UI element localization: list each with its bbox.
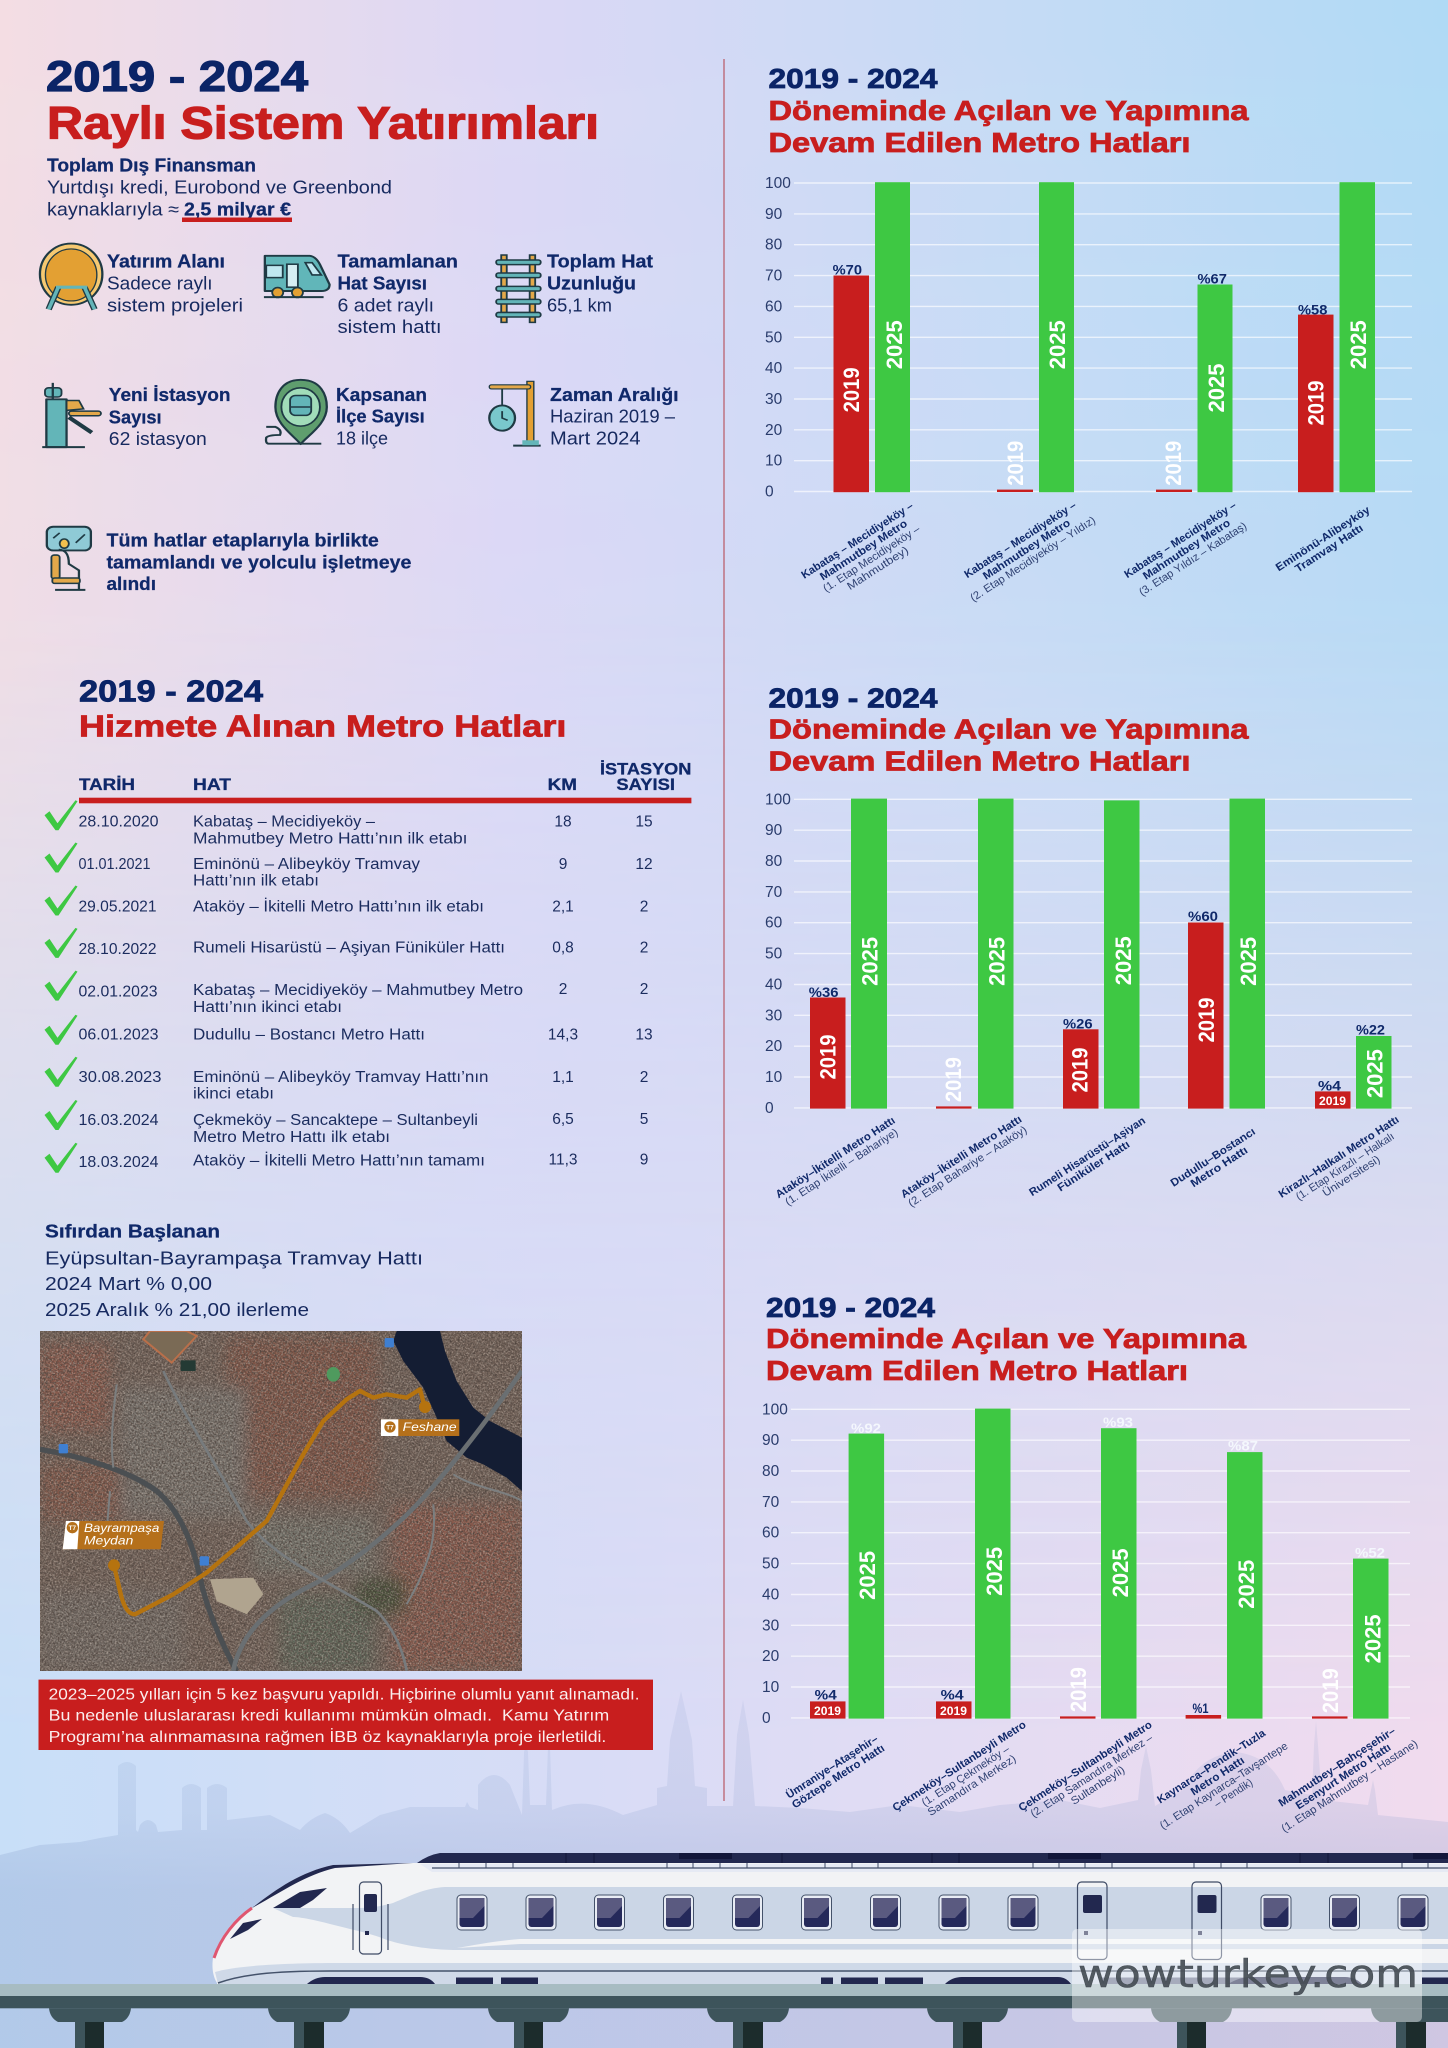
bars chart 1: 2025 xyxy=(882,320,907,369)
stat: time range xyxy=(550,384,679,448)
row 1: 15 xyxy=(635,813,653,830)
bars chart 2: %4 xyxy=(1318,1079,1342,1094)
bars chart 3: 2019 xyxy=(940,1706,967,1718)
chart 1 heading xyxy=(768,63,1249,158)
row 3 xyxy=(44,886,648,916)
illustration: high-speed train xyxy=(212,1853,1448,1984)
y axis chart 1: 30 xyxy=(765,391,783,408)
table rows xyxy=(44,800,653,1173)
stat: time range: Zaman Aralığı xyxy=(550,384,679,405)
row 7: 30.08.2023 xyxy=(78,1069,162,1086)
row 5 xyxy=(44,971,648,1016)
bars chart 3: 2019 xyxy=(1066,1667,1091,1712)
icon: station clock xyxy=(489,381,541,446)
x labels chart 3: Çekmeköy–Sultanbeyli Metro xyxy=(891,1719,1029,1814)
x labels chart 3: Metro Hattı xyxy=(1189,1755,1247,1798)
bars chart 3: 2025 xyxy=(855,1551,880,1600)
stat: districts covered xyxy=(336,384,427,448)
x labels chart 1: Mahmutbey Metro xyxy=(981,517,1073,582)
statement: all lines completed xyxy=(106,530,411,594)
x labels chart 1: Kabataş – Mecidiyeköy – xyxy=(962,499,1079,581)
y axis chart 1 xyxy=(765,175,791,500)
x labels chart 3: Esenyurt Metro Hattı xyxy=(1294,1742,1393,1812)
y axis chart 1: 100 xyxy=(765,175,791,192)
stat: investment area: Yatırım Alanı xyxy=(107,250,225,271)
row 7 xyxy=(44,1057,648,1103)
tram line text xyxy=(45,1220,423,1320)
y axis chart 3: 20 xyxy=(762,1648,780,1665)
row 1 xyxy=(44,800,653,848)
chart 1 heading: Döneminde Açılan ve Yapımına xyxy=(768,95,1249,126)
bars chart 2 xyxy=(809,799,1392,1109)
x labels chart 1: Mahmutbey) xyxy=(845,544,911,593)
row 4: 28.10.2022 xyxy=(78,941,156,958)
y axis chart 2: 80 xyxy=(765,853,783,870)
x labels chart 3: – Pendik) xyxy=(1212,1777,1255,1810)
x labels chart 3: (1. Etap Kaynarca–Tavşantepe xyxy=(1158,1740,1290,1832)
stat: districts covered: Kapsanan xyxy=(336,384,427,405)
x labels chart 3: (1. Etap Çekmeköy – xyxy=(920,1743,1013,1809)
bars chart 1: %58 xyxy=(1298,303,1328,318)
bars chart 2: 2025 xyxy=(858,937,882,986)
callout: funding note: Bu nedenle uluslararası kredi kullanımı mümkün olmadı. Kamu Yatırım xyxy=(49,1708,609,1725)
x labels chart 1: Kabataş – Mecidiyeköy – xyxy=(1122,499,1239,581)
row 5: 02.01.2023 xyxy=(78,983,158,1000)
title: 2019 - 2024 xyxy=(46,53,308,101)
stat: districts covered: 18 ilçe xyxy=(336,428,388,448)
row 9 xyxy=(44,1143,648,1173)
panel: tram line xyxy=(38,1220,653,1750)
x labels chart 2: Metro Hattı xyxy=(1189,1144,1250,1190)
x labels chart 3: (2. Etap Samandıra Merkez – xyxy=(1029,1732,1156,1820)
panel: chart 3 xyxy=(762,1292,1420,1842)
tram line text: Sıfırdan Başlanan xyxy=(45,1220,220,1242)
y axis chart 1: 0 xyxy=(765,484,774,500)
row 3: 2 xyxy=(640,899,648,916)
bars chart 3: 2025 xyxy=(1360,1614,1385,1663)
row 3: 2,1 xyxy=(552,899,574,916)
bars chart 1 xyxy=(833,182,1375,492)
y axis chart 2: 10 xyxy=(765,1069,783,1086)
financing text xyxy=(47,155,392,222)
y axis chart 1: 90 xyxy=(765,206,783,223)
y axis chart 3 xyxy=(762,1401,788,1727)
bars chart 3: 2025 xyxy=(1234,1560,1259,1609)
stat: new stations: 62 istasyon xyxy=(109,428,207,449)
chart 3 heading xyxy=(766,1292,1246,1386)
table heading: Hizmete Alınan Metro Hatları xyxy=(79,708,566,743)
label: Feshane xyxy=(381,1419,459,1436)
x labels chart 3 xyxy=(783,1719,1420,1842)
icon: turnstile xyxy=(42,383,101,447)
row 6: 13 xyxy=(635,1026,653,1044)
chart 2 heading: Döneminde Açılan ve Yapımına xyxy=(768,714,1249,745)
x labels chart 1: (1. Etap Mecidiyeköy – xyxy=(821,523,923,595)
x labels chart 3: Sultanbeyli) xyxy=(1069,1764,1127,1808)
row 9: 9 xyxy=(640,1152,648,1168)
stat: completed lines: Hat Sayısı xyxy=(338,272,427,294)
icon: passenger xyxy=(47,527,91,590)
row 6 xyxy=(44,1015,653,1045)
watermark: wowturkey.com xyxy=(1078,1952,1418,1996)
y axis chart 1: 20 xyxy=(765,422,783,439)
y axis chart 3: 90 xyxy=(762,1432,780,1449)
satellite map xyxy=(40,1331,523,1671)
y axis chart 3: 70 xyxy=(762,1494,780,1511)
bars chart 2: 2019 xyxy=(941,1057,966,1102)
bars chart 1: 2025 xyxy=(1204,363,1229,413)
row 7: Eminönü – Alibeyköy Tramvay Hattı’nın xyxy=(193,1069,488,1086)
stat: new stations: Yeni İstasyon xyxy=(109,384,230,405)
row 8: 6,5 xyxy=(552,1111,574,1128)
stat: new stations xyxy=(109,384,230,449)
y axis chart 1: 10 xyxy=(765,453,783,470)
bars chart 1: 2019 xyxy=(1003,441,1028,486)
x labels chart 2: (2. Etap Bahariye – Ataköy) xyxy=(906,1124,1029,1210)
city skyline silhouette xyxy=(0,1691,1448,2048)
y axis chart 3: 10 xyxy=(762,1679,780,1696)
x labels chart 1: (3. Etap Yıldız – Kabataş) xyxy=(1137,520,1249,599)
row 2: Hattı’nın ilk etabı xyxy=(193,872,319,890)
stat: completed lines: 6 adet raylı xyxy=(338,294,434,315)
callout: funding note xyxy=(38,1680,653,1750)
bars chart 1: %67 xyxy=(1198,271,1227,286)
x labels chart 2: (1. Etap İkitelli – Bahariye) xyxy=(783,1126,900,1208)
chart 2 heading: Devam Edilen Metro Hatları xyxy=(768,746,1190,777)
y axis chart 1: 40 xyxy=(765,360,783,377)
row 1: 18 xyxy=(554,813,572,830)
title xyxy=(46,53,599,148)
x labels chart 2: Üniversitesi) xyxy=(1321,1154,1383,1200)
row 6: 06.01.2023 xyxy=(78,1026,158,1044)
bars chart 3 xyxy=(810,1409,1388,1719)
tram line text: Eyüpsultan-Bayrampaşa Tramvay Hattı xyxy=(45,1247,423,1268)
x labels chart 1: (2. Etap Mecidiyeköy – Yıldız) xyxy=(968,514,1098,604)
stat: completed lines: sistem hattı xyxy=(338,316,442,337)
stat: districts covered: İlçe Sayısı xyxy=(336,406,425,427)
row 5: 2 xyxy=(640,981,648,998)
row 4: 0,8 xyxy=(552,939,574,956)
icon: rails xyxy=(496,255,541,322)
y axis chart 3: 100 xyxy=(762,1401,788,1418)
y axis chart 2: 20 xyxy=(765,1038,783,1055)
bars chart 1: 2019 xyxy=(1161,441,1186,486)
row 5: 2 xyxy=(559,981,567,998)
stat: investment area: Sadece raylı xyxy=(107,272,213,294)
chart 2 heading: 2019 - 2024 xyxy=(768,682,938,714)
x labels chart 2: Füniküler Hattı xyxy=(1055,1139,1132,1194)
bars chart 3: 2025 xyxy=(1108,1548,1133,1597)
financing text: Toplam Dış Finansman xyxy=(47,155,256,176)
row 2: Eminönü – Alibeyköy Tramvay xyxy=(193,856,420,873)
row 4: Rumeli Hisarüstü – Aşiyan Füniküler Hattı xyxy=(193,939,505,956)
bars chart 2: %36 xyxy=(809,985,839,1000)
label: Bayrampaşa Meydan: Bayrampaşa xyxy=(84,1521,160,1535)
row 1: 28.10.2020 xyxy=(78,813,159,830)
table heading: 2019 - 2024 xyxy=(79,673,264,708)
bars chart 3: 2019 xyxy=(1318,1668,1343,1713)
bars chart 2: 2019 xyxy=(1194,998,1219,1042)
panel: chart 2 xyxy=(765,682,1414,1220)
tram line text: 2025 Aralık % 21,00 ilerleme xyxy=(45,1299,309,1320)
panel: investments summary xyxy=(40,53,679,594)
row 1: Mahmutbey Metro Hattı’nın ilk etabı xyxy=(193,830,468,848)
y axis chart 1: 70 xyxy=(765,268,783,285)
row 7: 1,1 xyxy=(552,1069,574,1086)
tram line text: 2024 Mart % 0,00 xyxy=(45,1273,212,1294)
x labels chart 1: Mahmutbey Metro xyxy=(1141,517,1233,582)
y axis chart 3: 80 xyxy=(762,1463,780,1480)
table header: İSTASYON xyxy=(600,760,691,779)
row 4 xyxy=(44,928,648,958)
y axis chart 2: 0 xyxy=(765,1100,774,1117)
row 8: Metro Metro Hattı ilk etabı xyxy=(193,1129,390,1146)
row 3: 29.05.2021 xyxy=(78,899,156,916)
x labels chart 3: Ümraniye–Ataşehir– xyxy=(784,1732,880,1801)
y axis chart 2: 70 xyxy=(765,884,783,901)
bars chart 1: 2019 xyxy=(839,367,864,412)
row 7: 2 xyxy=(640,1069,648,1086)
statement: all lines completed: alındı xyxy=(106,573,156,594)
bars chart 2: %22 xyxy=(1356,1022,1385,1037)
divider xyxy=(723,59,725,1801)
financing text: kaynaklarıyla ≈ xyxy=(47,199,179,220)
row 6: 14,3 xyxy=(548,1026,578,1044)
bars chart 2: 2019 xyxy=(816,1034,840,1080)
label: Bayrampaşa Meydan: Meydan xyxy=(84,1533,134,1547)
table header: KM xyxy=(548,775,577,794)
row 8 xyxy=(44,1100,648,1146)
row 9: 18.03.2024 xyxy=(78,1154,159,1171)
panel: chart 1 xyxy=(765,63,1412,610)
bars chart 2: 2019 xyxy=(1319,1096,1346,1108)
bars chart 2: 2025 xyxy=(1111,936,1136,985)
chart 2 heading xyxy=(768,682,1249,777)
stat: total length: Toplam Hat xyxy=(547,250,653,271)
row 3: Ataköy – İkitelli Metro Hattı’nın ilk etabı xyxy=(193,898,484,916)
table header xyxy=(79,760,691,803)
x labels chart 2 xyxy=(773,1113,1414,1220)
row 4: 2 xyxy=(640,939,648,956)
x labels chart 1 xyxy=(799,495,1379,610)
x labels chart 3: (1. Etap Mahmutbey – Hastane) xyxy=(1279,1738,1420,1835)
bars chart 1: %70 xyxy=(833,262,862,277)
callout: funding note: Programı’na alınmamasına rağmen İBB öz kaynaklarıyla proje ilerletildi. xyxy=(49,1727,606,1746)
bars chart 3: %4 xyxy=(941,1688,964,1703)
row 7: ikinci etabı xyxy=(193,1086,274,1103)
x labels chart 3: Samandıra Merkez) xyxy=(926,1753,1018,1819)
y axis chart 3: 0 xyxy=(762,1710,771,1727)
bars chart 3: %4 xyxy=(815,1688,837,1703)
bars chart 3: %93 xyxy=(1103,1415,1134,1430)
bars chart 3: %1 xyxy=(1192,1701,1209,1716)
y axis chart 2 xyxy=(765,791,791,1117)
y axis chart 3: 60 xyxy=(762,1525,780,1542)
row 8: 16.03.2024 xyxy=(78,1112,159,1129)
x labels chart 1: Kabataş – Mecidiyeköy – xyxy=(799,500,916,582)
bars chart 1: 2025 xyxy=(1346,320,1371,369)
financing text: Yurtdışı kredi, Eurobond ve Greenbond xyxy=(47,176,392,197)
panel: metro lines table xyxy=(44,673,691,1173)
row 2: 01.01.2021 xyxy=(78,856,150,873)
bars chart 1: 2025 xyxy=(1045,320,1070,369)
y axis chart 1: 60 xyxy=(765,298,783,315)
table heading xyxy=(79,673,566,743)
chart 3 heading: 2019 - 2024 xyxy=(766,1292,935,1323)
stat: total length: 65,1 km xyxy=(547,294,612,315)
callout: funding note: 2023–2025 yılları için 5 kez başvuru yapıldı. Hiçbirine olumlu yanıt alınamadı. xyxy=(49,1686,640,1703)
y axis chart 2: 100 xyxy=(765,791,791,808)
train windows xyxy=(457,1895,1428,1930)
bars chart 2: 2025 xyxy=(984,937,1010,986)
x labels chart 2: Ataköy–İkitelli Metro Hattı xyxy=(773,1114,898,1201)
chart 3 heading: Döneminde Açılan ve Yapımına xyxy=(766,1323,1246,1354)
statement: all lines completed: tamamlandı ve yolculu işletmeye xyxy=(106,552,411,572)
x labels chart 3: Mahmutbey–Bahçeşehir– xyxy=(1277,1725,1398,1809)
x labels chart 2: (1. Etap Kirazlı – Halkalı xyxy=(1294,1131,1397,1203)
bars chart 3: 2025 xyxy=(982,1547,1007,1596)
bars chart 3: %92 xyxy=(851,1421,881,1436)
y axis chart 2: 40 xyxy=(765,976,783,994)
x labels chart 2: Rumeli Hisarüstü–Aşiyan xyxy=(1027,1115,1148,1199)
row 8: Çekmeköy – Sancaktepe – Sultanbeyli xyxy=(193,1112,478,1129)
x labels chart 2: Kirazlı–Halkalı Metro Hattı xyxy=(1277,1114,1401,1201)
x labels chart 2: Dudullu–Bostancı xyxy=(1169,1126,1258,1189)
stat: investment area: sistem projeleri xyxy=(107,294,243,315)
row 1: Kabataş – Mecidiyeköy – xyxy=(193,813,375,830)
y axis chart 3: 40 xyxy=(762,1586,780,1604)
stat: investment area xyxy=(107,250,243,315)
stat: total length xyxy=(547,250,653,315)
bars chart 3: %87 xyxy=(1228,1439,1258,1454)
row 6: Dudullu – Bostancı Metro Hattı xyxy=(193,1026,425,1044)
elevated track xyxy=(0,1984,1448,2048)
table header: SAYISI xyxy=(616,775,675,794)
icon: train xyxy=(264,256,330,298)
stat: completed lines: Tamamlanan xyxy=(338,250,458,271)
label: Bayrampaşa Meydan xyxy=(63,1521,164,1549)
x labels chart 3: Kaynarca–Pendik–Tuzla xyxy=(1155,1727,1269,1806)
label: Feshane: T7 xyxy=(386,1424,394,1431)
stat: time range: Mart 2024 xyxy=(550,428,640,448)
train doors xyxy=(353,1882,1222,1960)
icon: tunnel xyxy=(40,244,102,309)
y axis chart 2: 60 xyxy=(765,915,783,932)
x labels chart 2: Ataköy–İkitelli Metro Hattı xyxy=(898,1113,1024,1201)
chart 1 heading: Devam Edilen Metro Hatları xyxy=(768,127,1190,158)
x labels chart 1: Mahmutbey Metro xyxy=(818,518,910,583)
bars chart 2: %26 xyxy=(1063,1017,1093,1032)
row 8: 5 xyxy=(640,1111,648,1128)
row 2: 12 xyxy=(635,856,653,873)
bars chart 2: 2025 xyxy=(1236,937,1261,986)
chart 1 heading: 2019 - 2024 xyxy=(768,63,938,94)
bars chart 3: 2019 xyxy=(814,1706,841,1718)
x labels chart 3: Çekmeköy–Sultanbeyli Metro xyxy=(1017,1719,1155,1814)
y axis chart 1: 50 xyxy=(765,329,783,346)
row 5: Kabataş – Mecidiyeköy – Mahmutbey Metro xyxy=(193,982,523,999)
y axis chart 1: 80 xyxy=(765,237,783,254)
table header: TARİH xyxy=(79,775,135,794)
y axis chart 2: 90 xyxy=(765,822,783,839)
y axis chart 3: 30 xyxy=(762,1617,780,1634)
row 2: 9 xyxy=(559,856,567,873)
watermark xyxy=(1072,1929,1422,2022)
row 2 xyxy=(44,842,653,890)
bars chart 2: %60 xyxy=(1188,909,1218,924)
bars chart 1: 2019 xyxy=(1304,380,1329,426)
row 5: Hattı’nın ikinci etabı xyxy=(193,999,342,1016)
train undercarriage xyxy=(307,1977,1448,1984)
bars chart 2: 2019 xyxy=(1068,1048,1092,1092)
icon: map pin xyxy=(266,380,327,444)
x labels chart 3: Göztepe Metro Hattı xyxy=(790,1742,887,1811)
bars chart 3: %52 xyxy=(1355,1546,1385,1560)
y axis chart 2: 50 xyxy=(765,946,783,963)
row 9: Ataköy – İkitelli Metro Hattı’nın tamamı xyxy=(193,1152,485,1170)
title: Raylı Sistem Yatırımları xyxy=(47,97,599,148)
stat: time range: Haziran 2019 – xyxy=(550,406,676,427)
y axis chart 3: 50 xyxy=(762,1556,780,1573)
chart 3 heading: Devam Edilen Metro Hatları xyxy=(766,1355,1188,1386)
financing text: 2,5 milyar € xyxy=(184,199,291,220)
statement: all lines completed: Tüm hatlar etaplarıyla birlikte xyxy=(106,530,379,551)
label: Bayrampaşa Meydan: T7 xyxy=(69,1525,77,1532)
x labels chart 1: Tramvay Hattı xyxy=(1293,522,1366,575)
row 9: 11,3 xyxy=(548,1152,578,1168)
stat: new stations: Sayısı xyxy=(109,406,162,427)
label: Feshane: Feshane xyxy=(403,1420,457,1434)
bars chart 2: 2025 xyxy=(1363,1049,1388,1098)
y axis chart 2: 30 xyxy=(765,1007,783,1024)
stat: completed lines xyxy=(338,250,458,337)
x labels chart 1: Eminönü-Alibeyköy xyxy=(1274,504,1373,574)
stat: total length: Uzunluğu xyxy=(547,272,636,294)
table header: HAT xyxy=(193,775,232,794)
